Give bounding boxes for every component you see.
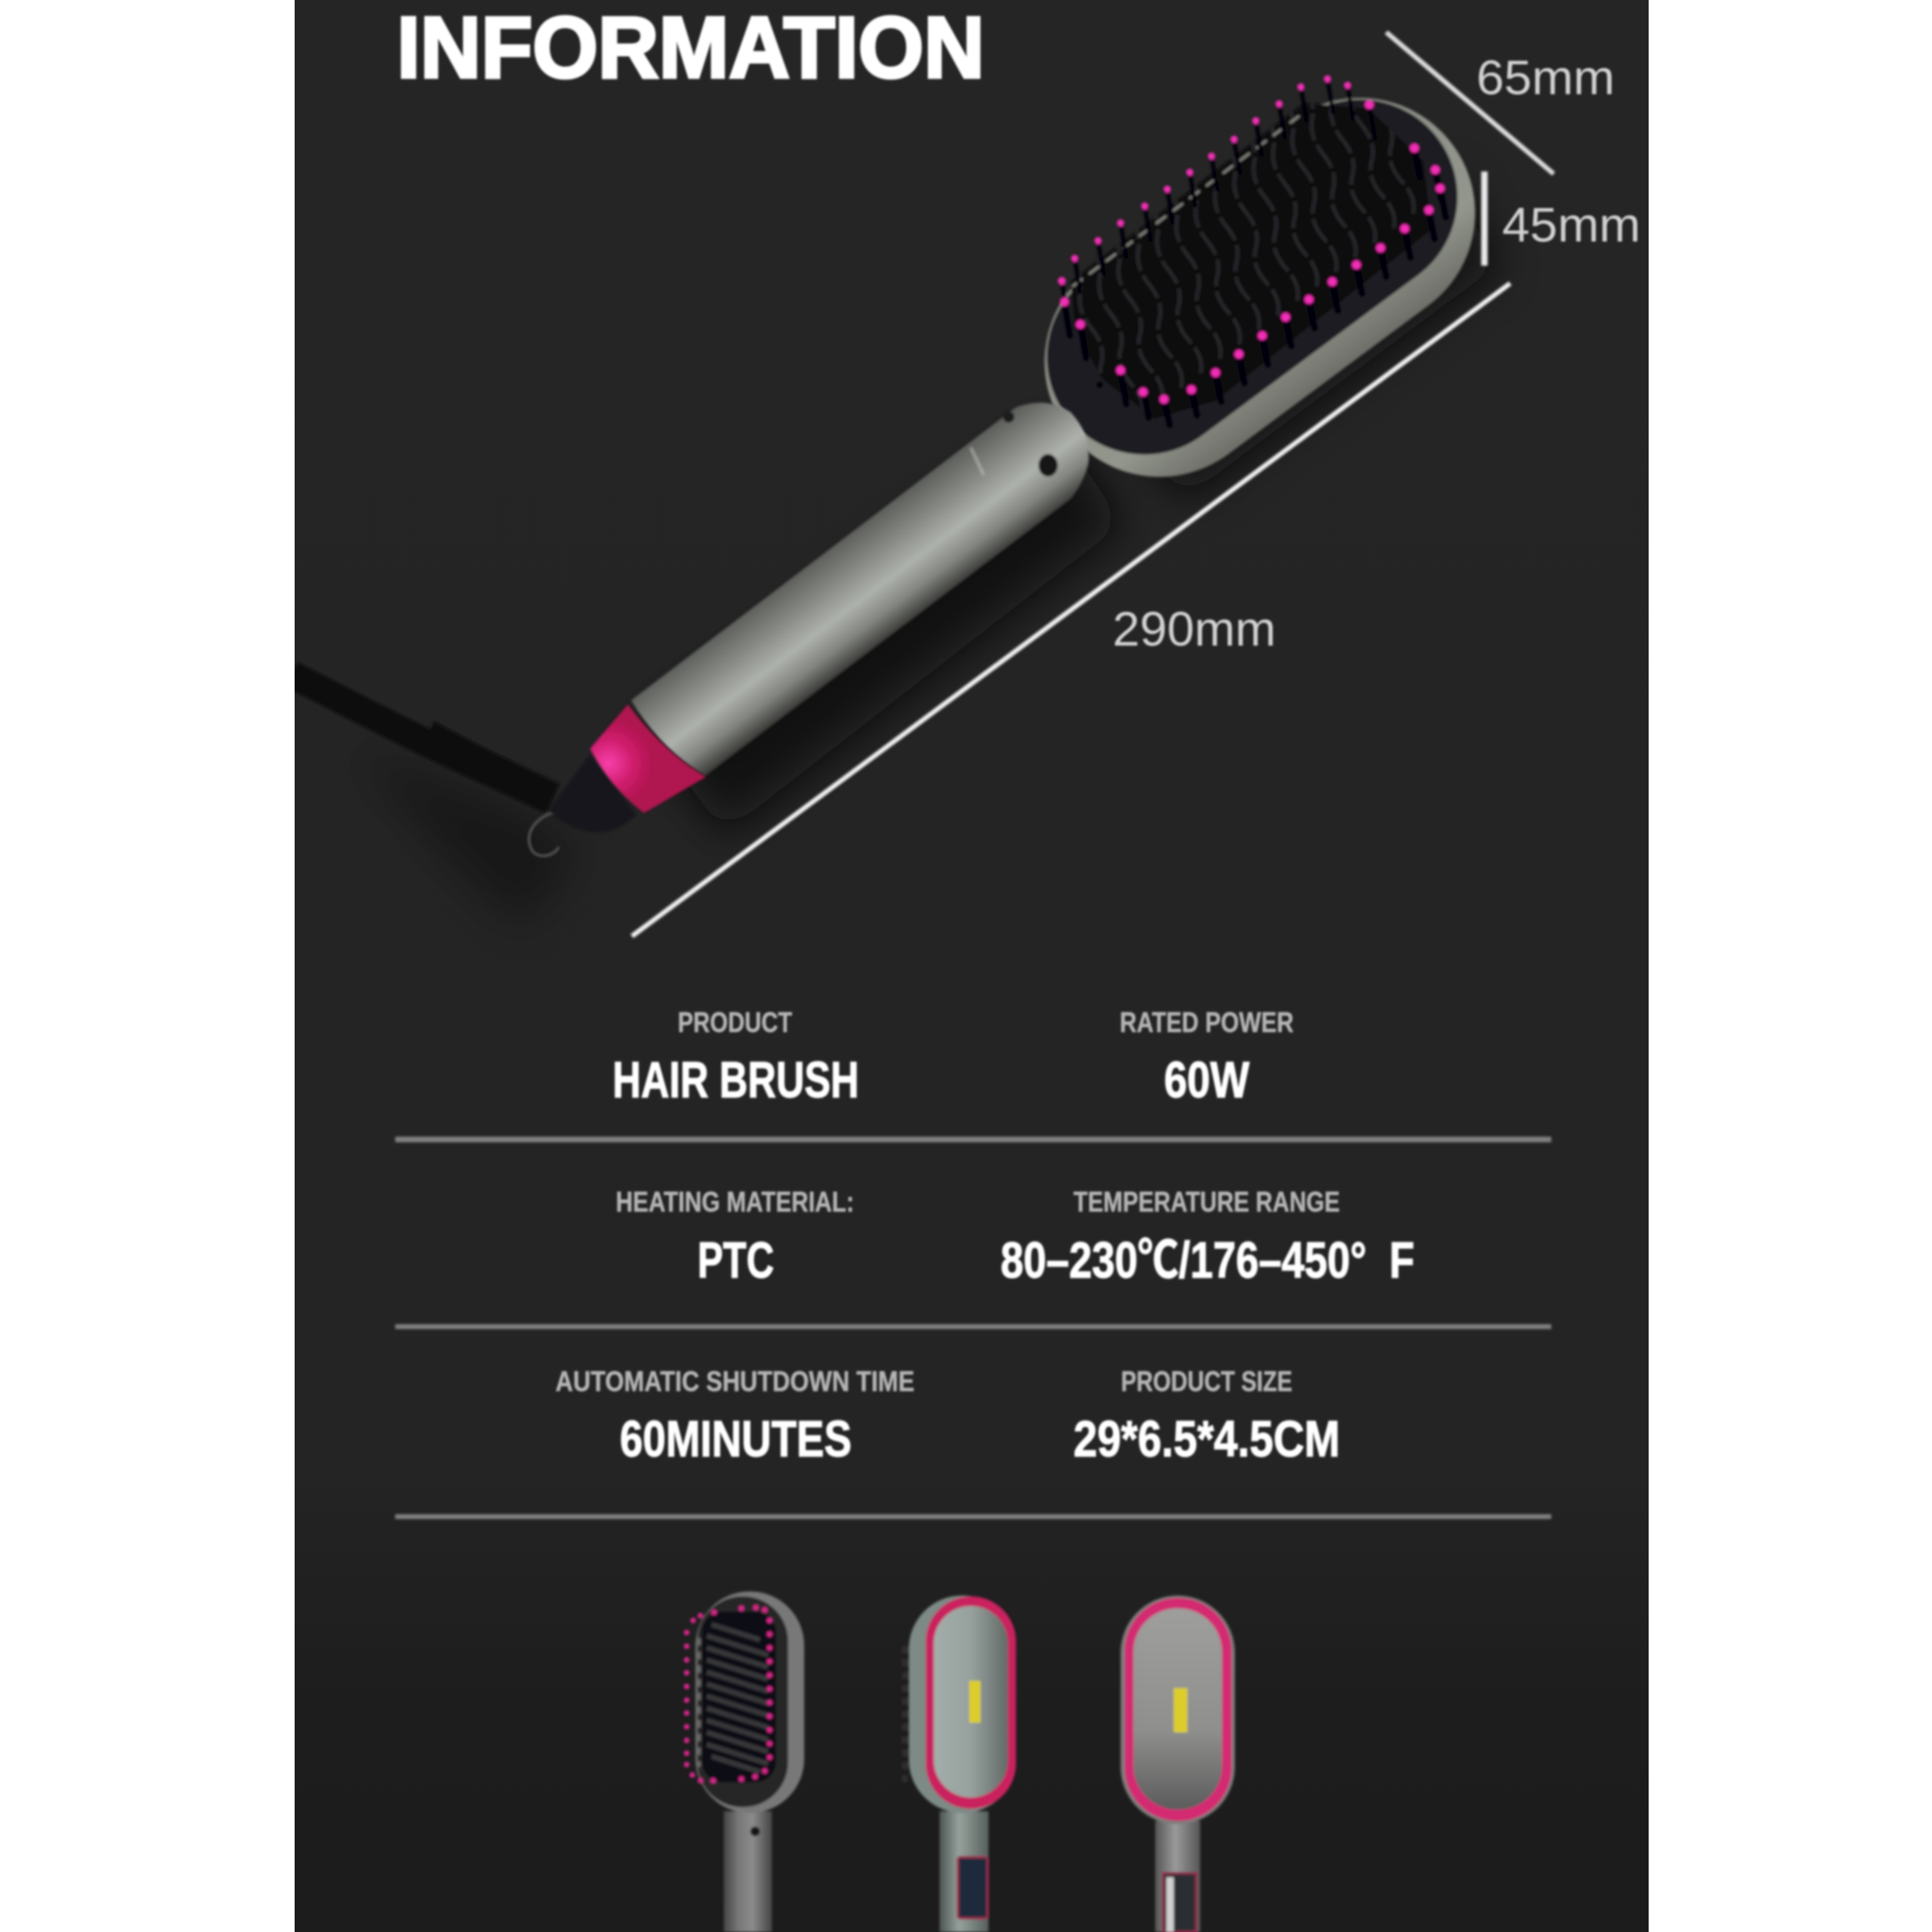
yellow logo xyxy=(969,1681,980,1723)
head face xyxy=(697,1596,788,1807)
dimension: 290mm: 290mm xyxy=(1113,602,1276,656)
spec: temperature range: 80–230℃/176–450° F xyxy=(1001,1232,1414,1289)
product image: angled hair brush with cord xyxy=(291,40,1521,926)
handle xyxy=(1155,1821,1200,1932)
spec: product xyxy=(613,1007,859,1108)
pink tips xyxy=(684,1605,773,1784)
brush view: angled back xyxy=(905,1596,1016,1932)
pink ring xyxy=(1125,1598,1232,1821)
infographic canvas xyxy=(295,0,1649,1932)
pink bristle tips xyxy=(1058,76,1444,404)
head body xyxy=(1121,1596,1235,1824)
spec: product: HAIR BRUSH xyxy=(613,1052,859,1108)
bristle waves xyxy=(1076,103,1417,411)
spec: heating material: HEATING MATERIAL: xyxy=(616,1187,854,1218)
brush handle xyxy=(631,402,1089,776)
brush view: bristle side xyxy=(684,1591,804,1932)
pink ring xyxy=(926,1596,1016,1809)
head face xyxy=(1133,1608,1222,1810)
handle xyxy=(939,1811,989,1932)
side bristles xyxy=(902,1646,908,1787)
dimension: 45mm xyxy=(1481,171,1641,266)
spec: temperature range: TEMPERATURE RANGE xyxy=(1074,1187,1340,1218)
spec: automatic shutdown time: 60MINUTES xyxy=(620,1411,852,1468)
spec: product size xyxy=(1074,1366,1340,1468)
head body xyxy=(1043,95,1476,478)
gray stub column xyxy=(697,1638,700,1767)
head body xyxy=(909,1596,1016,1813)
spec: heating material xyxy=(616,1187,854,1289)
spec: product: PRODUCT xyxy=(678,1007,792,1038)
brush shadow xyxy=(414,203,1499,902)
handle xyxy=(724,1811,772,1932)
head face xyxy=(934,1606,1008,1798)
head body xyxy=(696,1591,804,1813)
bristle pins xyxy=(1062,79,1446,425)
bristle mass xyxy=(1071,103,1431,419)
brush view: back xyxy=(1121,1596,1235,1932)
LCD display xyxy=(1163,1873,1196,1932)
spec: rated power: RATED POWER xyxy=(1120,1007,1294,1038)
bristles xyxy=(702,1612,776,1782)
spec: temperature range xyxy=(1001,1187,1414,1289)
spec: heating material: PTC xyxy=(697,1232,774,1289)
spec: rated power: 60W xyxy=(1164,1052,1249,1108)
spec: automatic shutdown time xyxy=(555,1366,914,1468)
panel: dark background xyxy=(295,0,1649,1932)
dimension: 65mm xyxy=(1386,32,1615,174)
yellow logo xyxy=(1174,1688,1187,1732)
pink collar xyxy=(590,704,706,813)
cord plug tip xyxy=(549,755,636,832)
dimension: 45mm: 45mm xyxy=(1502,198,1641,252)
dimension: 65mm: 65mm xyxy=(1476,51,1615,105)
spec table xyxy=(555,1007,1414,1468)
head face xyxy=(1045,98,1459,456)
dashed rim highlight xyxy=(1072,116,1299,287)
bristle stripes xyxy=(707,1624,768,1772)
brush head xyxy=(1043,73,1476,478)
LCD display xyxy=(958,1857,988,1918)
spec: rated power xyxy=(1120,1007,1294,1108)
spec: product size: 29*6.5*4.5CM xyxy=(1074,1411,1340,1468)
spec: automatic shutdown time: AUTOMATIC SHUTDOWN TIME xyxy=(555,1366,914,1397)
handle holes xyxy=(1038,454,1058,477)
title: INFORMATION xyxy=(397,0,985,96)
spec: product size: PRODUCT SIZE xyxy=(1121,1366,1293,1397)
dimension: 290mm xyxy=(632,283,1510,936)
power cord xyxy=(291,675,559,856)
